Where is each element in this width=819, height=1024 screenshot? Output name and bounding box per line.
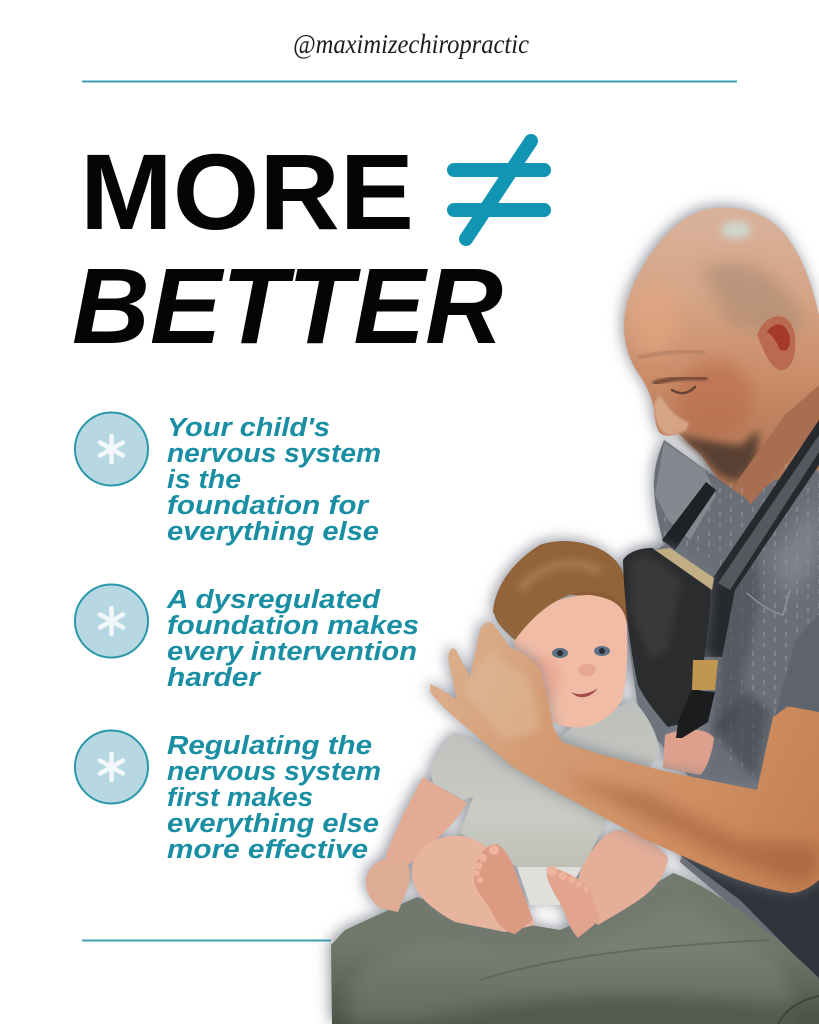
icon: asterisk circle 1 [75,412,148,486]
bullet 1 [75,412,381,546]
icon: asterisk circle 2 [75,584,148,658]
pocket [778,996,819,1024]
cushion tan top [655,548,714,590]
bullet text 1 [167,414,381,546]
baby left arm [385,777,467,864]
cushion [623,548,710,727]
handle text: @maximizechiropractic [293,29,529,59]
man shirt [625,400,819,980]
shirt pocket seam [747,590,790,615]
icon: asterisk circle 3 [75,730,148,804]
baby toes [474,845,589,892]
bullet text 2: foundation makes [167,612,419,640]
baby right hand [663,730,714,775]
neck [738,385,819,505]
title [72,131,544,366]
onesie [430,700,660,867]
hand highlight [462,650,540,740]
black strap right [702,420,819,657]
baby left foot [474,844,533,934]
baby left hand [366,857,410,912]
bullet text 2: A dysregulated [166,586,382,614]
bullet text 2: harder [167,664,262,692]
nose [578,664,596,676]
bullet text 2 [166,586,419,692]
bullet text 3: Regulating the [167,732,372,760]
bullet text 3: everything else [167,810,379,838]
bullet text 3 [167,732,381,864]
bullet text 1: nervous system [167,440,381,468]
shirt pattern [654,400,819,790]
grey strap band [718,435,819,590]
title word: more: MORE [80,131,414,252]
pants seam [480,940,770,980]
hair highlight [520,564,600,590]
pants light area [348,900,800,1024]
baby right thigh [575,830,668,925]
sleeve [775,615,819,716]
bullet text 1: everything else [167,518,379,546]
bracket [676,690,715,738]
bullet text 1: is the [167,466,241,494]
pants [331,873,819,1024]
bullet text 2: every intervention [167,638,417,666]
bullet text 1: Your child's [167,414,330,442]
lower dark shirt [680,855,819,980]
pants dark fold [420,997,819,1024]
shirt shadow details [712,500,819,790]
forearm shading [560,775,819,885]
head highlights [631,221,806,440]
hair top [494,542,627,640]
eyes [552,646,610,658]
collar [655,442,716,540]
nose [654,395,688,435]
bullet text 3: more effective [167,836,368,864]
man's forearm and hand [430,622,819,893]
bullet text 1: foundation for [167,492,370,520]
diaper [517,867,582,905]
photo: chiropractor holding baby [331,208,819,1024]
eye and brow [655,378,705,393]
bullet 3 [75,730,381,864]
cushion highlight [630,555,682,660]
top rule [82,80,737,82]
bullet text 3: nervous system [167,758,381,786]
baby right foot [547,868,600,938]
baby face [513,595,627,728]
baby [366,541,718,938]
bullet text 3: first makes [167,784,313,812]
man and pants cutout [331,208,819,1024]
ear [757,316,795,370]
baby left thigh [412,836,535,932]
head [624,208,819,500]
bullet 2 [75,584,419,692]
bottom rule [82,940,331,942]
beard [677,430,758,480]
mouth [571,688,598,697]
cushion tan block [692,660,718,690]
icon: not equal sign [454,141,544,239]
hair behind [493,541,627,640]
bullet list [75,412,419,864]
title word: better: BETTER [72,245,503,366]
cheek blush [518,656,562,704]
black strap left [662,482,716,550]
